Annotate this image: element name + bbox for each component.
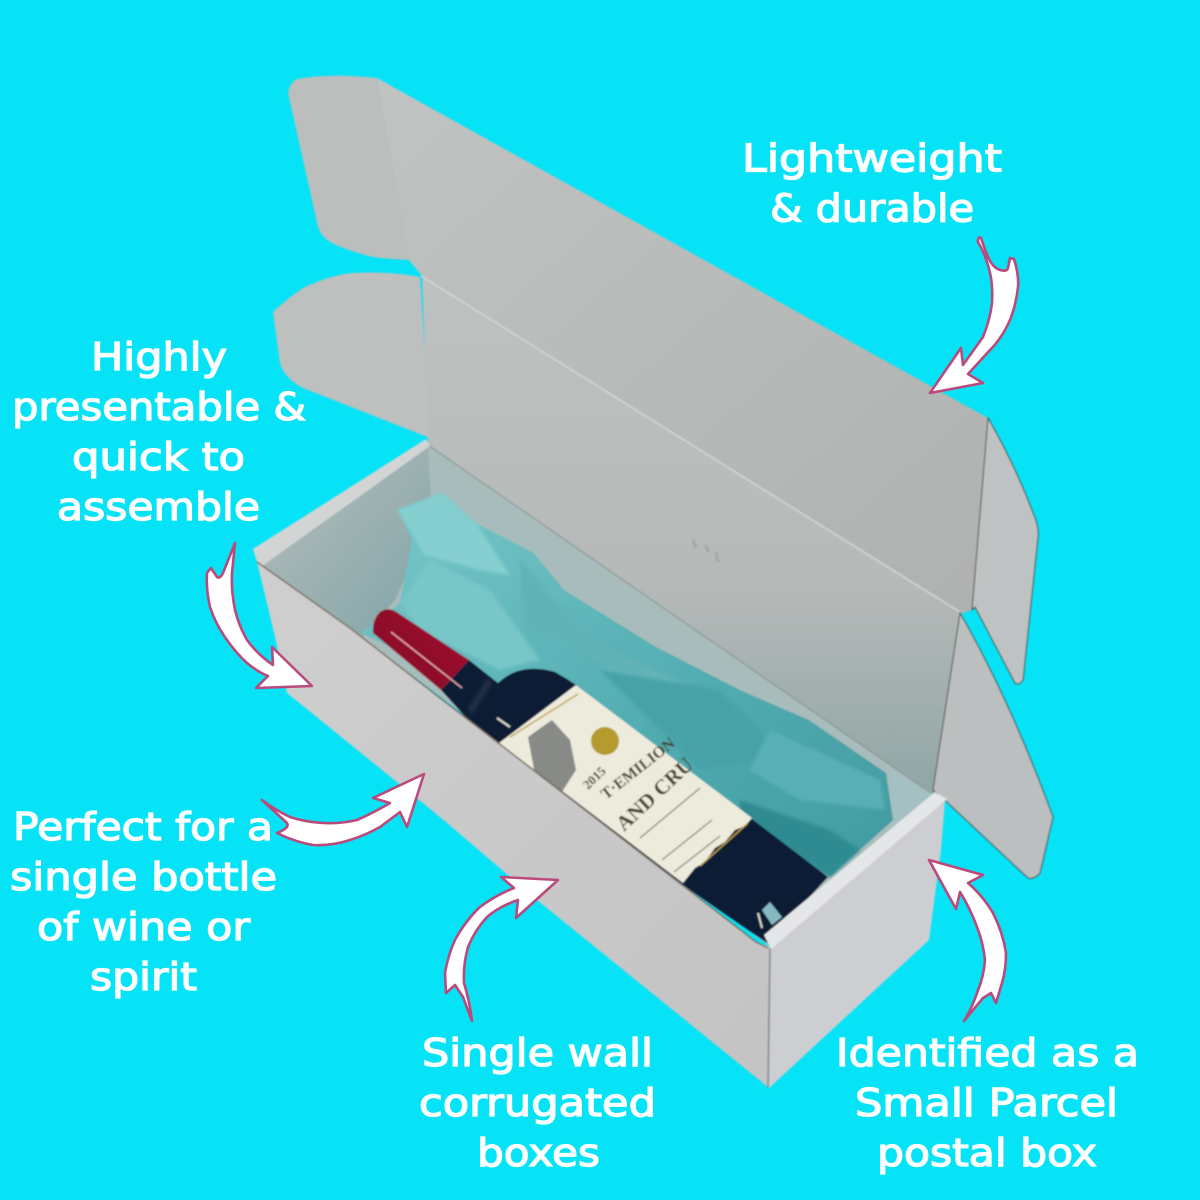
label engraving [528, 720, 576, 795]
lower left dust flap [273, 272, 430, 438]
small print [640, 788, 720, 872]
interior base [262, 444, 936, 945]
caption: presentable: quick to [72, 435, 245, 480]
interior left wall [262, 446, 432, 640]
caption: presentable: assemble [57, 485, 260, 530]
bottle highlights [762, 902, 782, 925]
front wall top cut edge [257, 562, 768, 948]
right wall rim [764, 792, 947, 949]
caption: single wall: corrugated [419, 1081, 656, 1126]
caption: small parcel [836, 1031, 1139, 1176]
arrow: single bottle [262, 774, 424, 845]
caption: single wall: boxes [477, 1131, 600, 1176]
caption: single wall: Single wall [422, 1031, 653, 1076]
top rim of left end [253, 439, 430, 566]
grand cru: AND CRU [611, 752, 698, 836]
caption: small parcel: postal box [877, 1131, 1097, 1176]
caption: lightweight [742, 136, 1002, 232]
caption: lightweight: & durable [770, 186, 974, 232]
right end wall [769, 800, 945, 1088]
front wall [257, 562, 771, 1088]
right lid tuck flap [972, 418, 1038, 684]
caption: small parcel: Small Parcel [855, 1081, 1118, 1126]
embossed marks [693, 540, 718, 562]
lid crease [421, 276, 960, 612]
bottle body [441, 660, 828, 943]
caption: presentable: Highly [91, 335, 227, 380]
back wall crease [428, 445, 935, 796]
caption: single bottle: Perfect for a [13, 805, 273, 850]
corner seam [768, 948, 770, 1088]
left lid tuck flap [288, 76, 409, 260]
bottle label [499, 685, 752, 883]
gold medallion [591, 727, 619, 755]
vintage year: 2015 [580, 763, 609, 792]
tissue paper [361, 493, 893, 877]
caption: single bottle: spirit [90, 955, 197, 1000]
caption: small parcel: Identified as a [836, 1031, 1139, 1076]
caption: presentable [12, 335, 306, 530]
foil capsule [373, 609, 469, 690]
name: T·EMILION [598, 735, 679, 803]
caption: lightweight: Lightweight [742, 136, 1002, 182]
arrow: lightweight [930, 238, 1018, 393]
capsule highlight [391, 632, 462, 688]
wine bottle [373, 609, 828, 943]
interior right end [890, 770, 936, 832]
open corrugated box [253, 76, 1053, 1088]
caption: presentable: presentable & [12, 385, 306, 430]
lower right dust flap [933, 613, 1053, 878]
caption: single bottle: of wine or [37, 905, 250, 950]
caption: single bottle: single bottle [10, 855, 277, 900]
back wall panel [422, 275, 960, 797]
arrow: single wall [445, 877, 558, 1021]
caption: single wall [419, 1031, 656, 1176]
arrow: small parcel [929, 860, 1006, 1021]
main lid panel [377, 78, 988, 614]
caption: single bottle [10, 805, 277, 1000]
arrow: presentable [207, 543, 312, 688]
